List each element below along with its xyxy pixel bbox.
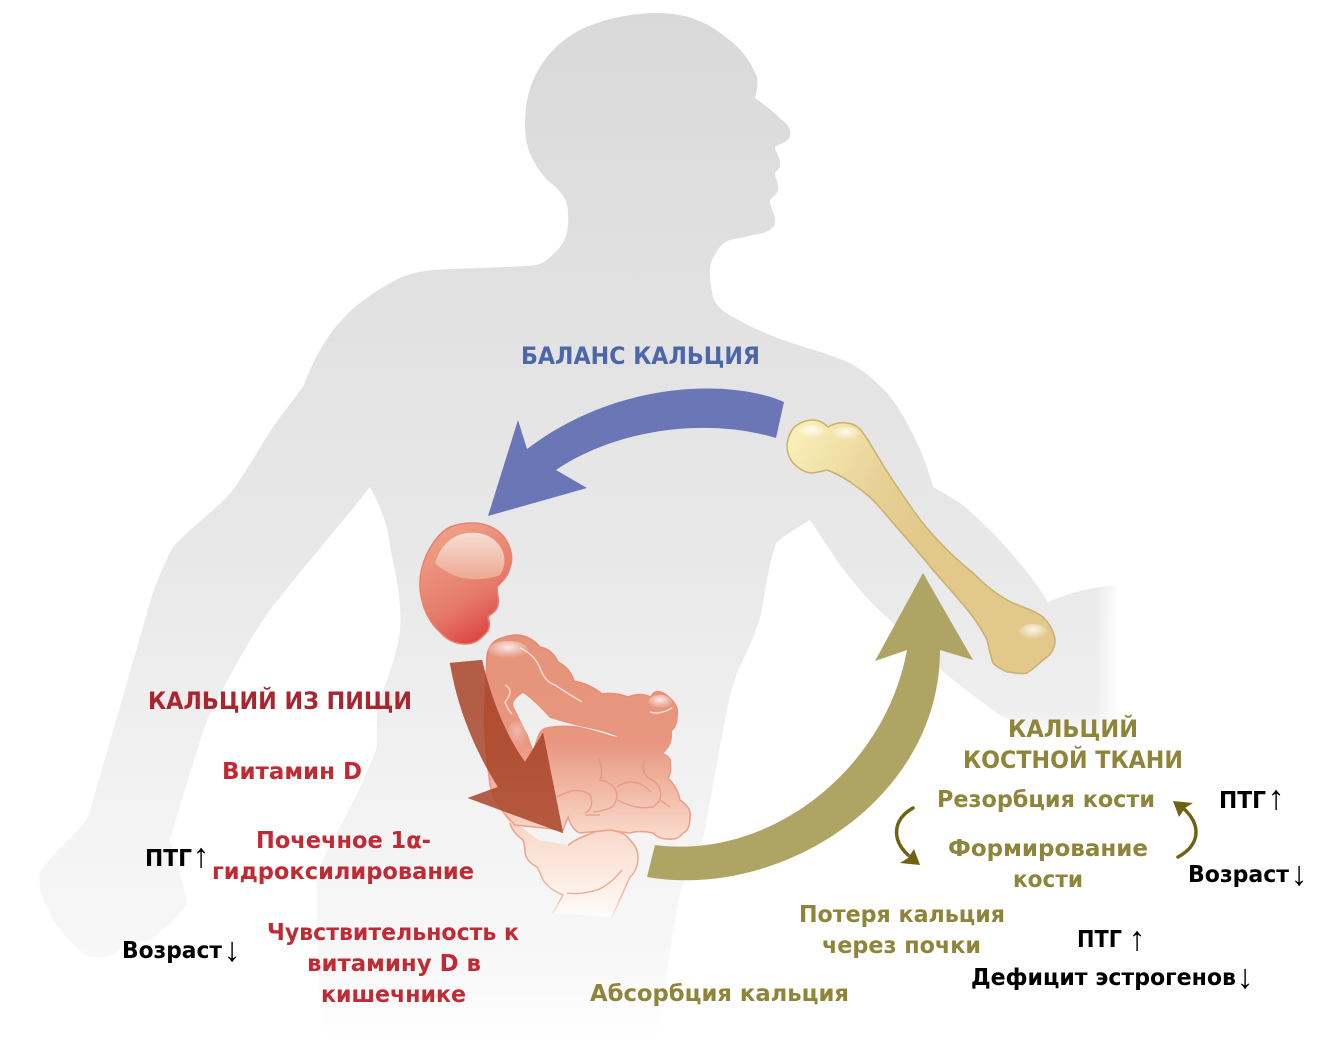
label: PTH up, left: ↑ <box>192 837 210 875</box>
label: estrogen deficiency: Дефицит эстрогенов <box>971 965 1236 991</box>
label: PTH up, bottom <box>1077 920 1146 958</box>
heading: bone calcium <box>963 714 1183 774</box>
label: intestinal vitamin D sensitivity <box>267 920 519 1008</box>
arrow: calcium absorption to bone <box>647 573 973 880</box>
label: calcium absorption: Абсорбция кальция <box>590 981 849 1007</box>
icon: curved arrow, resorption to formation <box>897 808 920 865</box>
label: intestinal vitamin D sensitivity: витамину D в <box>307 951 481 977</box>
label: estrogen deficiency <box>971 958 1254 996</box>
label: vitamin D: Витамин D <box>222 759 362 785</box>
label: bone formation: кости <box>1013 867 1083 893</box>
label: PTH up, right: ↑ <box>1268 779 1284 817</box>
label: PTH up, bottom: ↑ <box>1128 920 1146 958</box>
heading: bone calcium: КАЛЬЦИЙ <box>1008 714 1138 743</box>
label: PTH up, right <box>1219 779 1284 817</box>
heading: calcium balance: БАЛАНС КАЛЬЦИЯ <box>521 342 760 370</box>
label: PTH up, bottom: ПТГ <box>1077 927 1122 953</box>
label: estrogen deficiency: ↓ <box>1236 958 1254 996</box>
label: age down, right: ↓ <box>1290 855 1308 893</box>
icon: kidney <box>420 523 512 644</box>
label: renal 1-alpha hydroxylation: гидроксилирование <box>212 859 474 885</box>
label: age down, right <box>1188 855 1308 893</box>
label: age down, left: ↓ <box>224 931 240 969</box>
label: renal 1-alpha hydroxylation: Почечное 1α- <box>256 828 431 854</box>
label: age down, left <box>122 931 240 969</box>
label: renal calcium loss <box>799 902 1005 959</box>
label: bone formation <box>948 836 1148 893</box>
icon: intestines <box>485 635 690 917</box>
label: intestinal vitamin D sensitivity: кишечнике <box>321 982 466 1008</box>
arrow: dietary calcium into intestine <box>450 660 563 833</box>
heading: dietary calcium: КАЛЬЦИЙ ИЗ ПИЩИ <box>148 686 412 715</box>
label: bone formation: Формирование <box>948 836 1148 862</box>
label: renal calcium loss: через почки <box>822 933 981 959</box>
icon: bone <box>787 420 1055 674</box>
label: PTH up, left <box>145 837 210 875</box>
heading: bone calcium: КОСТНОЙ ТКАНИ <box>963 745 1183 774</box>
label: PTH up, left: ПТГ <box>145 846 192 872</box>
label: age down, left: Возраст <box>122 938 223 964</box>
icon: curved arrow, formation to resorption <box>1173 801 1196 857</box>
label: age down, right: Возраст <box>1188 862 1290 888</box>
label: bone resorption: Резорбция кости <box>937 787 1155 813</box>
label: PTH up, right: ПТГ <box>1219 788 1266 814</box>
label: renal 1-alpha hydroxylation <box>212 828 474 885</box>
arrow: calcium balance (bone to kidney) <box>488 388 784 516</box>
label: intestinal vitamin D sensitivity: Чувствительность к <box>267 920 519 946</box>
label: renal calcium loss: Потеря кальция <box>799 902 1005 928</box>
